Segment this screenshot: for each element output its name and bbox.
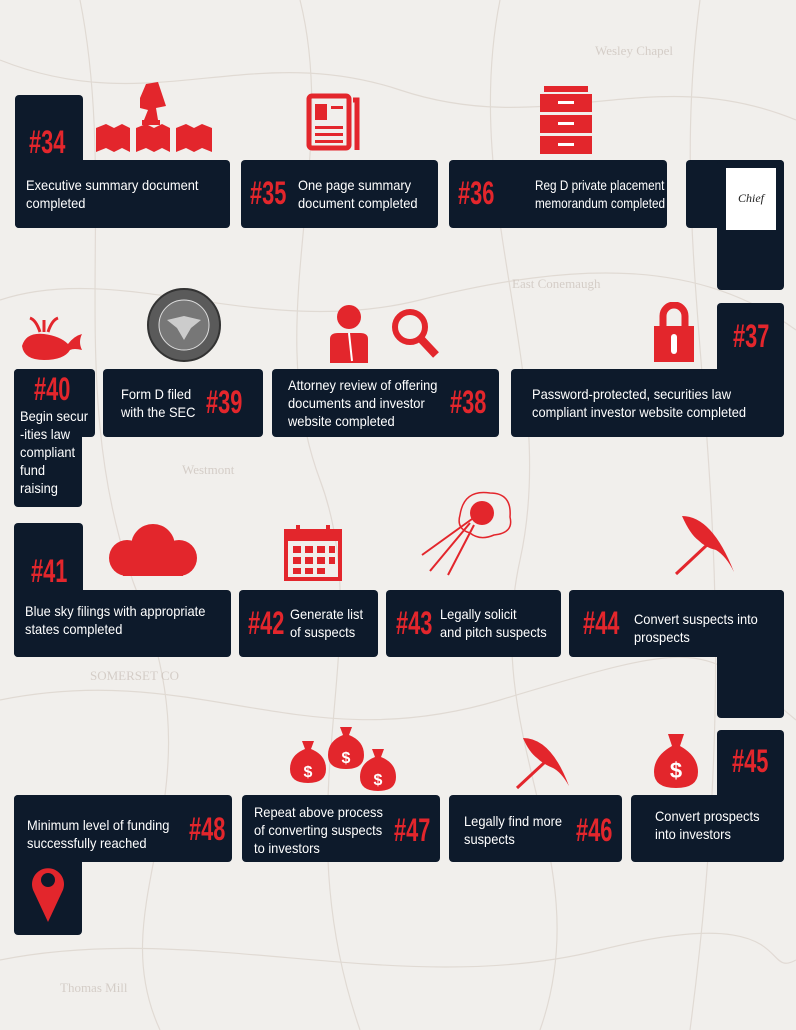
step 47 <box>242 795 440 862</box>
text: completed <box>26 195 85 211</box>
step 47: to investors <box>254 840 320 856</box>
icon: chess knight with map <box>96 82 212 152</box>
step 41 <box>14 523 83 657</box>
text: #45 <box>732 743 768 779</box>
step 46: #46 <box>576 812 612 848</box>
text: #48 <box>189 811 225 847</box>
icon: umbrella <box>675 516 734 576</box>
step 36: Reg D private placement <box>535 177 664 193</box>
text: successfully reached <box>27 835 147 851</box>
map background: Thomas Mill <box>60 980 128 995</box>
logo: chief: Chief <box>738 191 764 205</box>
text: Convert prospects <box>655 808 760 824</box>
text: Blue sky filings with appropriate <box>25 603 205 619</box>
text: Password-protected, securities law <box>532 386 731 402</box>
icon: money bags <box>290 727 396 791</box>
text: -ities law <box>20 426 70 442</box>
icon: money bags: $ <box>374 772 383 789</box>
step 43: and pitch suspects <box>440 624 547 640</box>
icon: money bag: $ <box>670 758 682 783</box>
text: #37 <box>733 318 769 354</box>
step 36 <box>449 160 667 228</box>
icon: attorney with magnifier <box>330 305 439 363</box>
step 39: #39 <box>206 384 242 420</box>
text: Executive summary document <box>26 177 199 193</box>
text: compliant <box>20 444 75 460</box>
icon: location pin <box>32 868 64 922</box>
step 42: of suspects <box>290 624 355 640</box>
icon: padlock <box>654 302 694 362</box>
step 48 <box>14 795 232 862</box>
step 36: #36 <box>458 175 494 211</box>
text: fund <box>20 462 45 478</box>
step 40 <box>14 369 95 437</box>
step 42 <box>239 590 378 657</box>
step 39: Form D filed <box>121 386 191 402</box>
step 46: Legally find more <box>464 813 562 829</box>
text: raising <box>20 480 58 496</box>
text: #41 <box>31 553 67 589</box>
logo box <box>686 160 784 228</box>
text: #44 <box>583 605 619 641</box>
text: into investors <box>655 826 731 842</box>
icon: shouting head <box>422 492 512 576</box>
map background: SOMERSET CO <box>90 668 179 683</box>
text: Convert suspects into <box>634 611 758 627</box>
step 38: #38 <box>450 384 486 420</box>
step 38: documents and investor <box>288 395 425 411</box>
text: Begin secur <box>20 408 88 424</box>
step 46: suspects <box>464 831 515 847</box>
step 46 <box>449 795 622 862</box>
icon: calendar <box>284 525 342 581</box>
text: #40 <box>34 371 70 407</box>
text: compliant investor website completed <box>532 404 746 420</box>
step 35: #35 <box>250 175 286 211</box>
step 34 <box>15 95 83 228</box>
map background: Wesley Chapel <box>595 43 673 58</box>
step 43: Legally solicit <box>440 606 517 622</box>
icon: document <box>306 94 360 150</box>
step 39 <box>103 369 263 437</box>
step 38: website completed <box>288 413 395 429</box>
step 45 <box>717 730 784 862</box>
step 47: Repeat above process <box>254 804 383 820</box>
step 43 <box>386 590 561 657</box>
icon: umbrella <box>516 738 569 790</box>
icon: filing cabinet <box>540 86 592 154</box>
step 38 <box>272 369 499 437</box>
step 35: One page summary <box>298 177 411 193</box>
step 35 <box>241 160 438 228</box>
step 44 <box>569 590 784 657</box>
map background: East Conemaugh <box>512 276 601 291</box>
icon: money bag <box>654 734 698 788</box>
text: states completed <box>25 621 122 637</box>
icon: money bags: $ <box>342 750 351 767</box>
step 47: of converting suspects <box>254 822 382 838</box>
text: #34 <box>29 124 65 160</box>
step 42: Generate list <box>290 606 363 622</box>
text: Minimum level of funding <box>27 817 169 833</box>
step 37 <box>717 303 784 437</box>
step 35: document completed <box>298 195 418 211</box>
step 36: memorandum completed <box>535 195 665 211</box>
step 42: #42 <box>248 605 284 641</box>
icon: money bags: $ <box>304 764 313 781</box>
map background: Westmont <box>182 462 235 477</box>
icon: SEC seal <box>147 288 221 362</box>
step 47: #47 <box>394 812 430 848</box>
text: prospects <box>634 629 690 645</box>
step 38: Attorney review of offering <box>288 377 437 393</box>
logo: chief <box>726 168 776 230</box>
step 39: with the SEC <box>121 404 195 420</box>
icon: whale <box>22 316 82 360</box>
icon: cloud <box>109 524 197 576</box>
step 43: #43 <box>396 605 432 641</box>
